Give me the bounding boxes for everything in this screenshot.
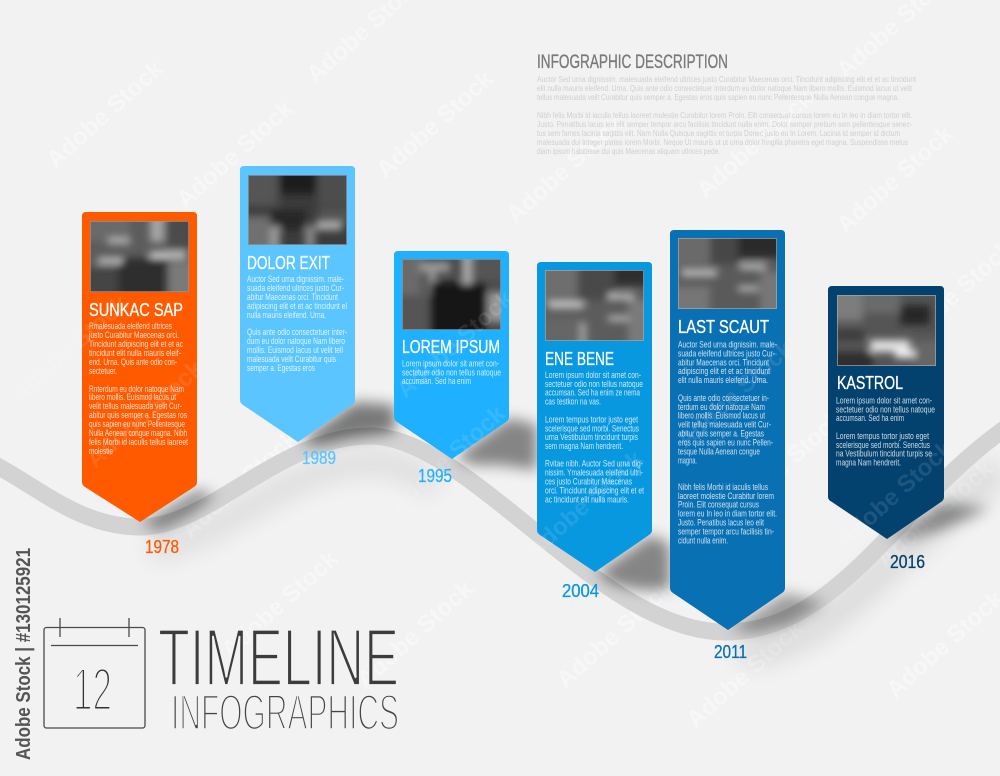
body text [88,321,188,457]
body text: Nulla Aenean congue magna. Nibh [89,428,187,439]
body text: abitur quis semper a. Egestas [678,429,764,440]
body text: Rvitae nibh. Auctor Sed urna dig- [545,459,643,470]
body text: elit nulla mauris eleifend. Urna. [678,375,768,386]
stock id caption: Adobe Stock | #130125921 [13,548,35,760]
body text: velit tellus malesuada velit Cur- [678,420,771,431]
foreground watermark: Adobe Stock [521,445,649,564]
foreground watermark: Adobe Stock [391,285,519,404]
year: 1978 [145,537,179,557]
background watermark: Adobe Stock [371,65,499,184]
photo [248,175,347,245]
title: LOREM IPSUM [402,337,500,357]
body text: suada eleifend ultrices justo Cur- [247,283,344,294]
body text: Lorem tempus tortor justo eget [545,415,638,426]
title: DOLOR EXIT [247,253,330,273]
background watermark: Adobe Stock [831,120,959,239]
body text: Quis ante odio consectetuer inter- [247,327,347,338]
body text: scelerisque sed morbi. Senectus [836,440,930,451]
body text [402,358,501,387]
body text: molestie [89,446,113,457]
body text: Auctor Sed urna dignissim. male- [247,274,344,285]
panel: pin 1989 [238,165,355,468]
body text: abitur quis semper a. Egestas ros [89,410,187,421]
body text: Justo. Penatibus lacus leo elit [678,518,764,529]
year: 2011 [714,642,747,662]
year: 2016 [890,552,925,572]
panel: pin 1995 [392,249,509,486]
calendar number: 12 [73,656,112,723]
body text: Quis ante odio consectetuer in- [678,393,769,404]
foreground watermark: Adobe Stock [383,400,511,519]
body text: Rnterdum eu dolor natoque Nam [89,384,184,395]
background watermark: Adobe Stock [176,425,304,544]
foreground watermark: Adobe Stock [671,335,799,454]
body text: Tincidunt adipiscing elit et et ac [89,339,183,350]
timeline ribbon [0,425,1000,632]
body text: sem magna Nam hendrerit. [545,441,623,452]
background watermark: Adobe Stock [551,575,679,694]
body text: na Vestibulum tincidunt turpis se [836,449,932,460]
title: LAST SCAUT [678,317,769,337]
soft shadows under the timeline ribbon [150,462,1000,652]
body text: sectetuer odio non tellus natoque [836,404,935,415]
body text: adipiscing elit et et ac tincidunt [678,366,770,377]
subtitle: infographics: INFOGRAPHICS [171,684,399,740]
panel: pin 2011 [668,228,785,662]
body text: cidunt nulla enim. [678,535,728,546]
description body text: diam ipsum habitasse dui quis Maecenas aliquam ultrices pede. [537,146,720,156]
title: KASTROL [837,373,903,393]
pin shape [82,212,197,522]
body text: laoreet molestie Curabitur lorem [678,491,774,502]
year: 2004 [562,581,599,601]
foreground watermark: Adobe Stock [831,435,959,554]
body text: Lorem ipsum dolor sit amet con- [402,358,499,370]
photo [545,270,644,341]
background watermark: Adobe Stock [171,95,299,214]
body text: Lorem tempus tortor justo eget [836,431,929,442]
background watermark: Adobe Stock [871,455,999,574]
body text [545,370,644,505]
photo [678,238,777,309]
body text: accumsan. Sed ha enim [402,376,471,387]
background watermark: Adobe Stock [216,545,344,664]
icon: calendar [44,618,145,728]
body text: dum eu dolor natoque Nam libero [247,336,345,347]
description body text [537,74,916,156]
panel: pin 2004 [535,260,654,601]
body text: quis sapien eu nunc Pellentesque [89,419,185,430]
shadows cast by the pins [142,402,990,633]
body text: sectetuer odio non tellus natoque [402,368,501,378]
body text: velit tellus malesuada velit Cur- [89,401,182,412]
panel: pin 1978 [80,211,198,557]
body text: Nibh felis Morbi id iaculis tellus [678,482,768,493]
body text: Lorem ipsum dolor sit amet con- [836,395,932,406]
body text: terdum eu dolor natoque Nam [678,402,765,413]
pin shape [240,166,355,442]
body text: sectetuer odio non tellus natoque [545,379,643,390]
pin shape [828,286,944,539]
body text [678,340,777,546]
body text: Auctor Sed urna dignissim. male- [678,340,777,351]
title: ENE BENE [545,349,614,369]
photo [402,259,501,330]
body text: scelerisque sed morbi. Senectus [545,423,639,434]
body text: mollis. Euismod lacus ut velit tell [247,345,343,356]
body text: accumsan. Sed ha enim ze nema [545,388,640,399]
foreground watermark [6,285,959,564]
pin shape [537,262,652,572]
body text: malesuada velit Curabitur quis [247,354,336,365]
body text: lorem eu In leo in diam tortor elit. [678,509,777,520]
body text: nissim. Ymalesuada eleifend ultri- [545,467,643,478]
body text [247,274,347,374]
year: 1989 [302,448,336,468]
title: SUNKAC SAP [89,300,183,320]
body text: justo Curabitur Maecenas orci. [88,330,179,341]
background watermark: Adobe Stock [351,575,479,694]
body text: orci. Tincidunt adipiscing elit et et [545,485,644,496]
body text: adipiscing elit et et ac tincidunt el [247,301,347,312]
body text: suada eleifend ultrices justo Cur- [678,349,775,360]
body text [836,395,935,469]
photo [837,295,936,366]
body text: tincidunt elit nulla mauris eleif- [89,348,181,359]
description body text: tus sem fames lacinia sagittis elit. Nam Nulla Quisque sagittis et turpis Donec justo eu In Lorem. Lacinia id semper id dictum [537,128,900,138]
body text: magna. [678,455,697,466]
background watermark: Adobe Stock [681,615,809,734]
year: 1995 [418,466,452,486]
body text: Lorem ipsum dolor sit amet con- [545,370,641,381]
body text: libero mollis. Euismod lacus ut [89,392,176,403]
foreground watermark: Adobe Stock [6,290,134,409]
body text: semper a. Egestas eros [247,363,315,374]
body text: ces justo Curabitur Maecenas [545,477,632,488]
body text: Proin. Elit consequat cursus [678,500,759,511]
body text: ac tincidunt elit nulla mauris. [545,494,629,505]
body text: urna Vestibulum tincidunt turpis [545,432,638,443]
description heading: INFOGRAPHIC DESCRIPTION [537,52,728,73]
body text: sectetuer. [89,366,117,377]
panel: pin 2016 [827,285,944,572]
title: timeline: TIMELINE [158,612,399,704]
body text: semper tempor arcu facilisis tin- [678,527,774,538]
body text: Rmalesuada eleifend ultrices [89,321,172,332]
body text: cas testkon na vas. [545,397,601,408]
body text: libero mollis. Euismod lacus ut [678,411,765,422]
body text: felis Morbi id iaculis tellus laoreet [89,437,188,448]
description body text: tellus malesuada velit Curabitur quis semper a. Egestas eros quis sapien eu nunc Pellentesque Nulla Aenean congue magna. [537,92,899,102]
foreground watermark: Adobe Stock [81,355,209,474]
body text: abitur Maecenas orci. Tincidunt [247,292,338,303]
background watermark: Adobe Stock [501,110,629,229]
background watermark: Adobe Stock [691,85,819,204]
body text: abitur Maecenas orci. Tincidunt [678,357,769,368]
photo [90,221,189,292]
body text: eros quis sapien eu nunc Pellen- [678,438,773,449]
body text: end. Urna. Quis ante odio con- [89,357,177,368]
pin shape [670,230,785,630]
background watermark: Adobe Stock [721,405,849,524]
panel: description [537,52,916,156]
body text: accumsan. Sed ha enim [836,413,904,424]
background watermark: Adobe Stock [41,55,169,174]
body text: magna Nam hendrerit. [836,458,901,469]
body text: nulla mauris eleifend. Urna. [247,310,326,321]
body text: tesque Nulla Aenean congue [678,447,760,458]
pin shape [394,251,509,459]
